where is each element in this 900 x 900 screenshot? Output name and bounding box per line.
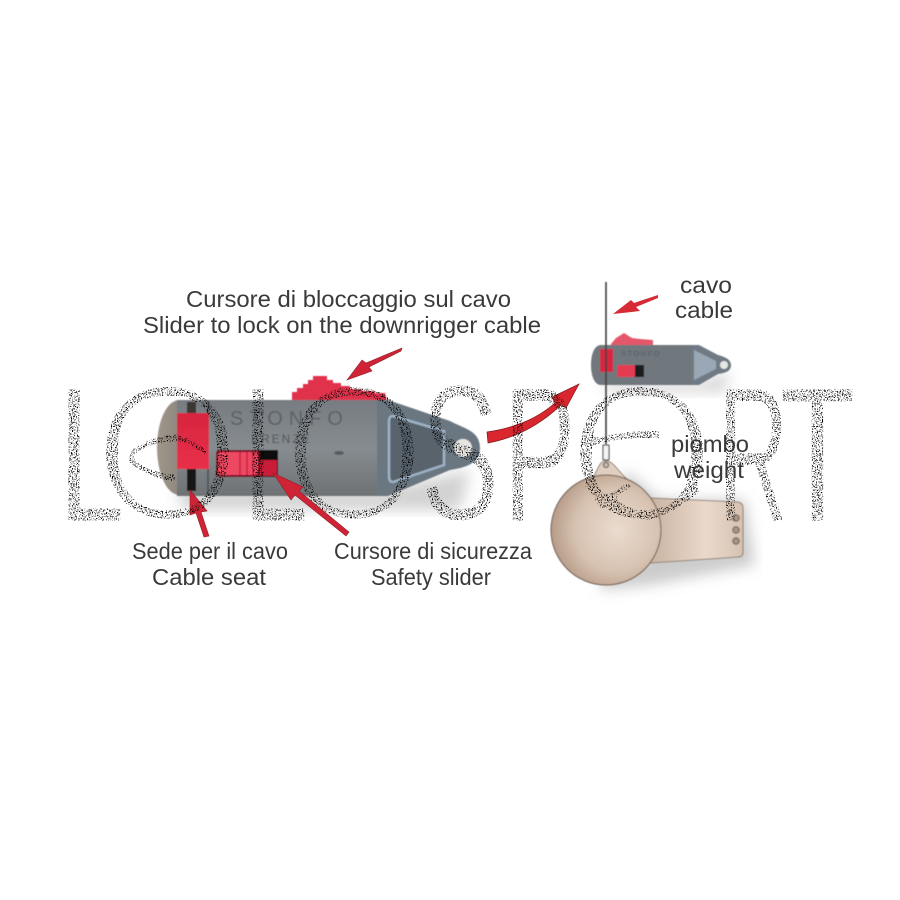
cable line [605,282,607,444]
stippled watermark: round letters: O [283,345,426,562]
label: safety slider [334,538,532,590]
rounded end cap [157,400,200,495]
label: safety slider: Cursore di sicurezza [334,538,532,564]
small red block [600,349,613,372]
label: locking slider: Slider to lock on the downrigger cable [143,312,541,338]
tail section [377,400,480,496]
label: cable [675,272,733,323]
label: cable: cavo [680,272,732,298]
stippled watermark: narrow letters: P [504,347,576,564]
red seat block [177,413,209,469]
safety slider [216,450,260,477]
small tail hole [720,361,728,369]
small assembled rig [551,282,755,590]
embossed STONFO lettering: STONFO [230,408,349,430]
small device body [591,345,692,385]
cable seat slot bottom [187,469,196,491]
device shadow [175,470,470,510]
embossed BRENZE lettering: BRENZE [251,432,312,446]
label: safety slider: Safety slider [371,564,491,590]
label: weight: piombo [671,431,749,457]
label: cable seat [132,538,288,590]
stippled watermark: narrow letters: L [59,346,124,564]
weight plate [650,498,743,563]
swivel [603,445,609,460]
stippled watermark: round letters: O [568,343,715,562]
small tail recess [694,350,716,380]
label: cable seat: Cable seat [152,564,267,590]
label: locking slider: Cursore di bloccaggio sul cavo [186,286,511,312]
small embossed lettering: STONFO [621,349,661,358]
pointer arrow: locking slider [347,348,402,380]
small slider slot [632,365,644,377]
pointer arrow: cable seat [190,490,209,537]
rig shadow [600,372,730,392]
eyelet hole [603,462,609,468]
stippled watermark: narrow letters [59,344,855,564]
small slider [617,365,635,377]
small tail [692,345,731,385]
label: weight [671,431,749,483]
weight eyelet tab [592,461,628,480]
stippled watermark: narrow letters: T [780,345,855,564]
main clip device [157,376,480,510]
red locking slider teeth [292,376,387,401]
plate holes [733,515,739,544]
tail hole [454,439,472,457]
cable seat slot top [187,402,196,414]
label: cable seat: Sede per il cavo [132,538,288,564]
groove [207,400,209,496]
body mark [334,451,344,455]
weight shadow [600,470,755,590]
stippled watermark: narrow letters: R [718,345,788,564]
label: cable: cable [675,297,733,323]
label: weight: weight [673,457,745,483]
label: locking slider [143,286,541,338]
stippled watermark: narrow letters: S [421,344,499,562]
safety slider slot [258,450,278,477]
stippled watermark: round letters: O [94,343,241,562]
pointer arrow: cable [613,295,658,314]
small teeth [611,333,653,345]
tail triangular recess [389,416,444,482]
stippled watermark: round letters [94,343,715,562]
curved arrow to small device [487,384,579,443]
device body [177,400,377,496]
lead ball [551,475,661,585]
stippled watermark: narrow letters: L [243,346,308,564]
pointer arrow: safety slider [273,473,349,536]
